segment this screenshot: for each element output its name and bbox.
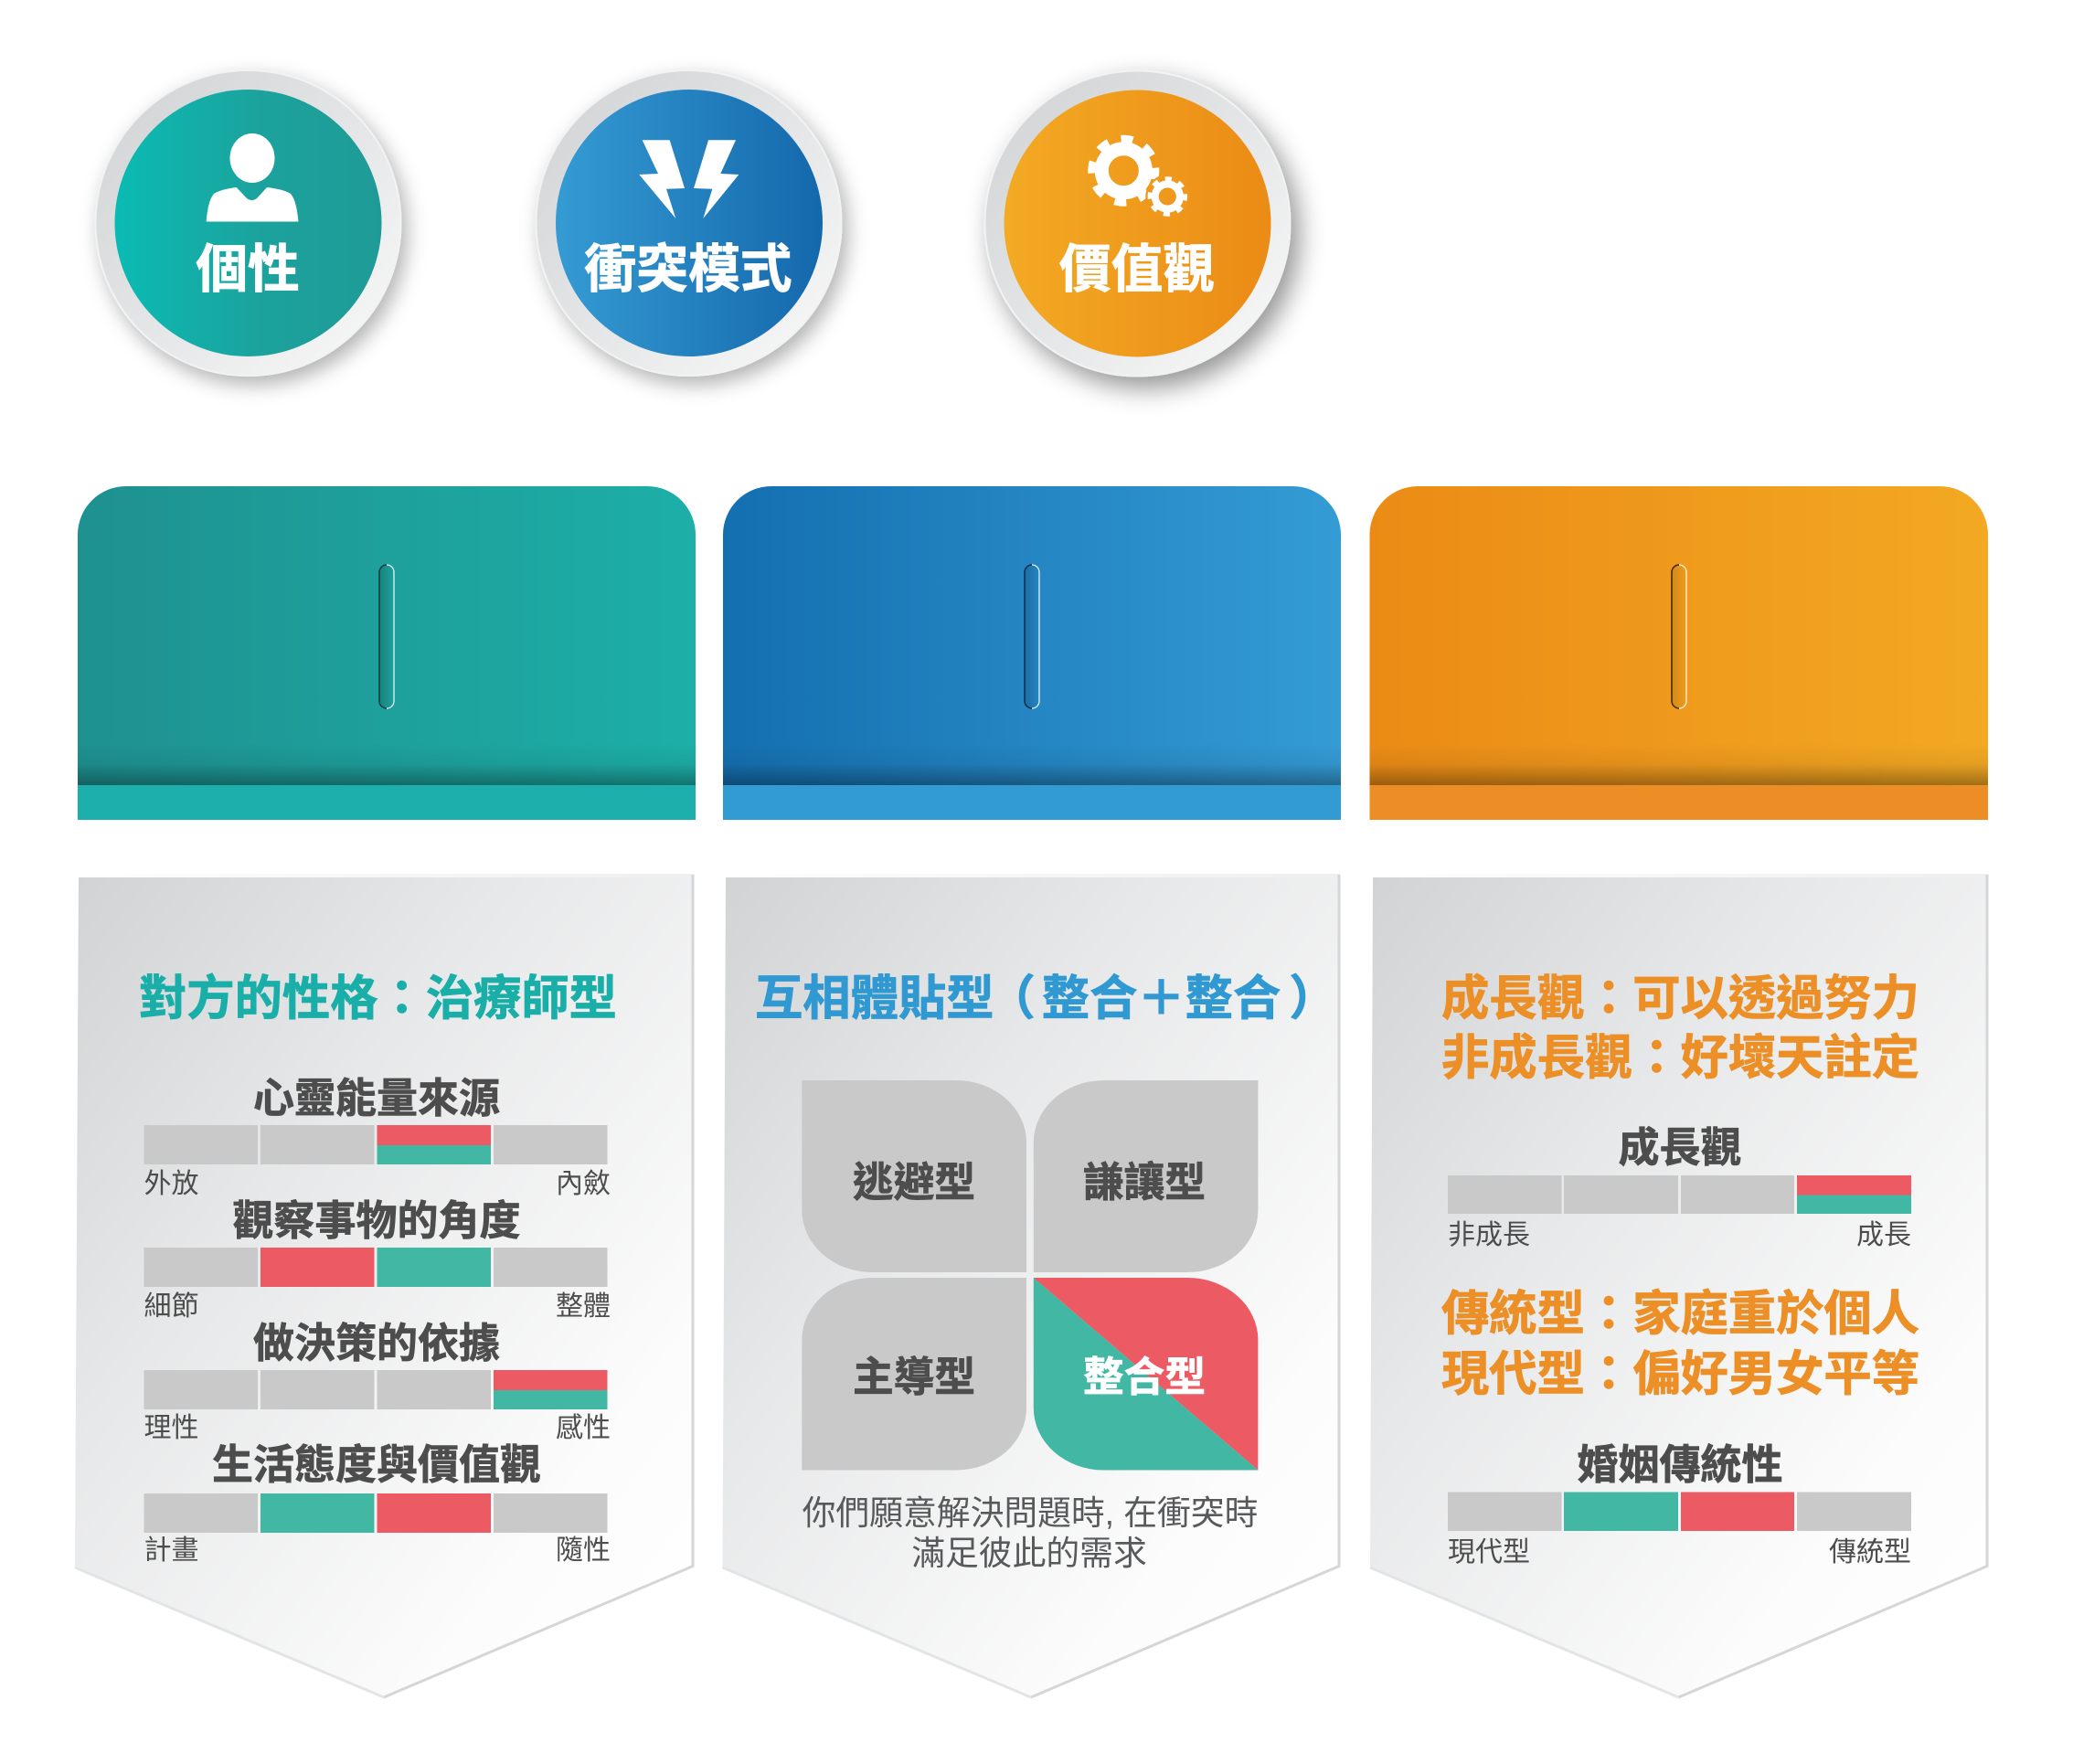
icon: person [207, 133, 298, 221]
panel header: orange [1369, 486, 1988, 820]
icon: gears [1089, 136, 1189, 218]
badge: 衝突模式 [536, 70, 841, 376]
scale: 觀察事物的角度: 整體 [556, 1291, 611, 1322]
scale: 婚姻傳統性: 婚姻傳統性 [1577, 1441, 1783, 1488]
heading: traditional vs modern [1441, 1288, 1919, 1401]
scale: 心靈能量來源: 心靈能量來源 [253, 1075, 500, 1121]
slot [1672, 565, 1686, 708]
description: 你們願意解決問題時, 在衝突時 [803, 1494, 1258, 1532]
scale: 婚姻傳統性: 現代型 [1448, 1537, 1530, 1567]
scale: 生活態度與價值觀 [144, 1441, 611, 1566]
scale: 生活態度與價值觀: 計畫 [144, 1536, 199, 1566]
panel header: teal [78, 486, 696, 820]
panel: personality [75, 874, 694, 1697]
heading: traditional vs modern: 傳統型：家庭重於個人 [1441, 1288, 1919, 1341]
description: 滿足彼此的需求 [911, 1535, 1147, 1572]
scale: 成長觀: 非成長 [1448, 1220, 1530, 1250]
heading: 互相體貼型（整合＋整合） [755, 972, 1337, 1025]
scale: 做決策的依據: 做決策的依據 [253, 1320, 500, 1366]
heading: growth mindset [1441, 972, 1919, 1085]
badge ring [95, 70, 400, 376]
scale: 做決策的依據: 感性 [556, 1413, 611, 1443]
blue strip [723, 785, 1341, 820]
scale: 心靈能量來源: 內斂 [556, 1169, 611, 1199]
scale: 成長觀 [1448, 1124, 1911, 1250]
quadrant: 整合型: 整合型 [1083, 1355, 1206, 1400]
quadrant: 整合型 [1034, 1278, 1258, 1471]
scale: 婚姻傳統性: 傳統型 [1829, 1537, 1911, 1567]
pentagon card [75, 874, 694, 1697]
scale: 心靈能量來源: 外放 [144, 1169, 199, 1199]
scale: 觀察事物的角度: 觀察事物的角度 [232, 1197, 521, 1244]
panel: conflict mode [722, 874, 1340, 1697]
scale: 做決策的依據: 理性 [144, 1413, 199, 1443]
badge disc [1004, 90, 1270, 356]
badge: 個性 [95, 70, 400, 376]
scale: 成長觀: 成長觀 [1618, 1124, 1742, 1171]
scale: 觀察事物的角度 [144, 1197, 611, 1322]
heading: 對方的性格：治療師型 [139, 972, 617, 1025]
slot [1025, 565, 1039, 708]
pentagon card [1370, 874, 1988, 1697]
scale: 心靈能量來源 [144, 1075, 611, 1199]
badge: 價值觀 [985, 71, 1291, 377]
heading: growth mindset: 非成長觀：好壞天註定 [1441, 1032, 1919, 1085]
heading: growth mindset: 成長觀：可以透過努力 [1441, 972, 1919, 1025]
quadrant: 謙讓型 [1034, 1080, 1258, 1272]
scale: 觀察事物的角度: 細節 [144, 1291, 199, 1322]
scale: 做決策的依據 [144, 1320, 611, 1443]
badge ring [536, 70, 841, 376]
badge ring [985, 71, 1291, 377]
scale: 生活態度與價值觀: 生活態度與價值觀 [212, 1441, 541, 1488]
quadrant chart [802, 1080, 1258, 1471]
scale: 生活態度與價值觀: 隨性 [556, 1536, 611, 1566]
label: 個性: 個性 [196, 241, 300, 299]
orange strip [1369, 785, 1988, 820]
badge disc [556, 90, 823, 356]
scale: 成長觀: 成長 [1856, 1220, 1911, 1250]
teal strip [78, 785, 696, 820]
quadrant: 主導型 [802, 1278, 1026, 1470]
panel: values [1370, 874, 1988, 1697]
scale: 婚姻傳統性 [1448, 1441, 1911, 1567]
label: 衝突模式: 衝突模式 [584, 241, 792, 299]
heading: traditional vs modern: 現代型：偏好男女平等 [1441, 1348, 1919, 1401]
slot [379, 565, 394, 708]
quadrant: 謙讓型: 謙讓型 [1083, 1161, 1206, 1206]
panel header: blue [723, 486, 1341, 820]
quadrant: 逃避型: 逃避型 [853, 1161, 975, 1206]
label: 價值觀: 價值觀 [1059, 241, 1215, 299]
quadrant: 主導型: 主導型 [853, 1355, 975, 1400]
badge disc [115, 90, 382, 356]
pentagon card [722, 874, 1340, 1697]
icon: lightning bolts [639, 140, 739, 218]
description [803, 1494, 1258, 1572]
quadrant: 逃避型 [802, 1080, 1026, 1272]
